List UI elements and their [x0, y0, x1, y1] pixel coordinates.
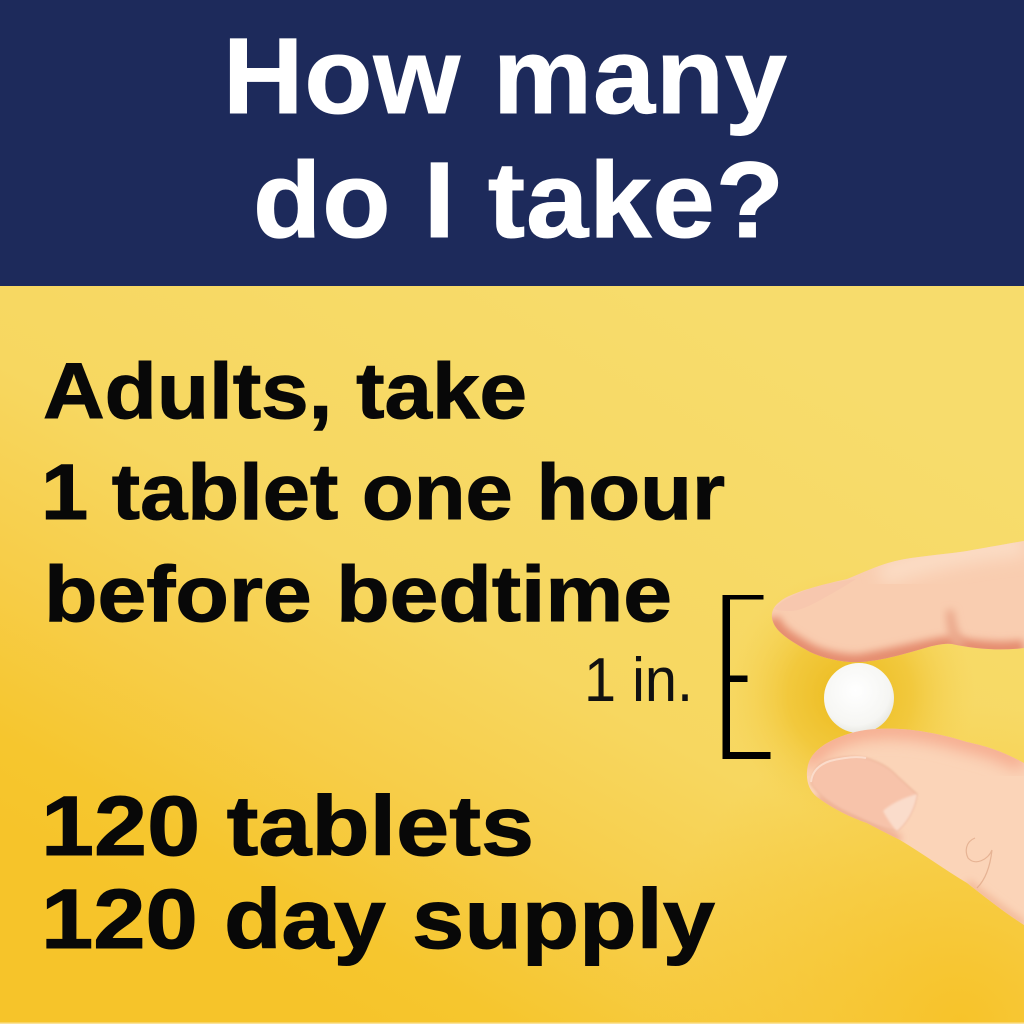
supply information: 120 day supply [41, 872, 715, 966]
dosage instructions: before bedtime [44, 549, 672, 638]
upper fingernail [774, 579, 856, 611]
size label: 1 in.: 1 in. [584, 646, 693, 715]
title [223, 15, 788, 260]
dosage instructions [41, 346, 725, 638]
title: How many [223, 15, 788, 136]
illustration: fingers holding tablet [760, 530, 1024, 930]
upper finger [772, 541, 1024, 662]
lower finger [800, 720, 1024, 930]
header banner [0, 0, 1024, 286]
nail lunula [883, 794, 917, 831]
dosage instructions: Adults, take [43, 346, 527, 435]
tablet [824, 663, 894, 733]
dosage instructions: 1 tablet one hour [41, 447, 725, 536]
knuckle creases [966, 838, 992, 888]
size bracket [722, 595, 770, 759]
supply information [41, 779, 715, 966]
title: do I take? [253, 139, 785, 260]
lower fingernail [811, 757, 917, 831]
nail rim [811, 757, 866, 782]
yellow background panel [0, 286, 1024, 1024]
supply information: 120 tablets [41, 779, 534, 873]
